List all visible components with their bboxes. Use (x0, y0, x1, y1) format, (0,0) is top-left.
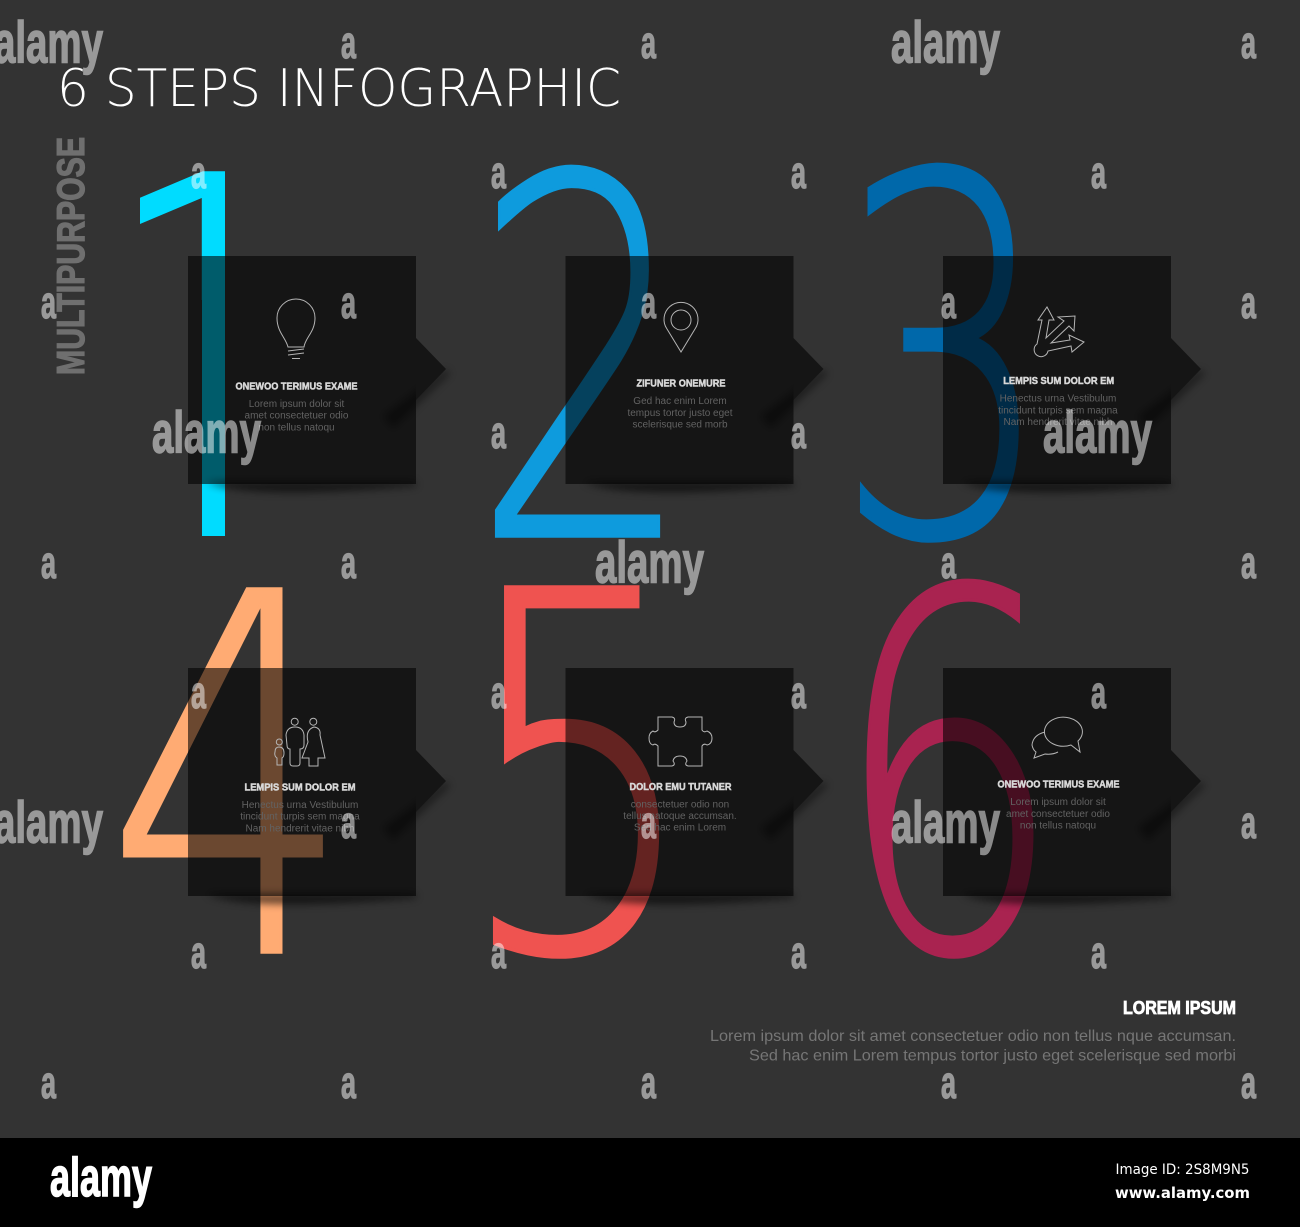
body text: tellus natoque accumsan. (623, 811, 737, 822)
watermarks: a (341, 797, 357, 848)
panel: step 6 (832, 487, 1205, 1068)
body text (998, 394, 1118, 428)
watermarks: a (41, 277, 57, 328)
watermarks: a (491, 927, 507, 978)
watermarks: a (1241, 1057, 1257, 1108)
card with arrow (943, 668, 1205, 904)
body text: scelerisque sed morb (632, 420, 728, 430)
heading: DOLOR EMU TUTANER (630, 781, 732, 793)
watermarks: a (641, 277, 657, 328)
watermarks: a (1091, 667, 1107, 718)
card with arrow (188, 668, 450, 904)
number 5: 5 (456, 487, 700, 1068)
watermarks: a (491, 147, 507, 198)
footer text block (710, 998, 1236, 1064)
icon: family (275, 718, 325, 766)
watermarks: a (341, 537, 357, 588)
watermarks: alamy (152, 401, 261, 466)
watermarks: a (1241, 277, 1257, 328)
watermarks: a (341, 277, 357, 328)
body text: Sed hac enim Lorem (634, 822, 726, 834)
footer paragraph: Lorem ipsum dolor sit amet consectetuer odio non tellus nque accumsan. (710, 1028, 1236, 1045)
watermarks: a (341, 17, 357, 68)
heading: ONEWOO TERIMUS EXAME (998, 778, 1120, 790)
body text: Henectus urna Vestibulum (242, 800, 358, 811)
card with arrow (188, 256, 450, 492)
watermarks: a (641, 1057, 657, 1108)
body text: Nam hendrerit vitae nibh (246, 824, 354, 834)
watermarks: a (791, 927, 807, 978)
watermarks: a (941, 1057, 957, 1108)
body text: tincidunt turpis sem magna (240, 812, 360, 822)
body text: Henectus urna Vestibulum (1000, 394, 1116, 404)
number 1: 1 (57, 74, 358, 654)
watermarks: a (941, 537, 957, 588)
card with arrow (566, 668, 828, 904)
watermarks: a (191, 927, 207, 978)
watermarks: a (791, 667, 807, 718)
vertical label: MULTIPURPOSE (50, 137, 93, 375)
watermarks: a (941, 277, 957, 328)
body text: tincidunt turpis sem magna (998, 406, 1118, 416)
panel: step 2 (472, 75, 828, 654)
body text (1006, 797, 1110, 832)
body text (627, 396, 733, 430)
body text: amet consectetuer odio (245, 410, 349, 422)
watermarks: a (1241, 797, 1257, 848)
number 2: 2 (472, 75, 694, 654)
heading: LEMPIS SUM DOLOR EM (1003, 375, 1114, 387)
body text: Lorem ipsum dolor sit (249, 399, 345, 410)
bottom bar (0, 1138, 1300, 1227)
footer heading: LOREM IPSUM (1123, 998, 1236, 1018)
panel: step 3 (835, 72, 1205, 652)
title: 6 STEPS INFOGRAPHIC (57, 59, 621, 119)
watermarks: alamy (891, 791, 1000, 856)
icon: light bulb (277, 299, 315, 358)
body text: non tellus natoqu (1020, 820, 1096, 832)
body text (240, 800, 360, 834)
body text (245, 399, 349, 434)
watermarks: a (641, 17, 657, 68)
watermarks: a (791, 407, 807, 458)
watermarks: a (1091, 147, 1107, 198)
body text: Nam hendrerit vitae nibh (1004, 417, 1112, 428)
icon: puzzle piece (649, 717, 712, 766)
watermarks: a (191, 667, 207, 718)
watermarks: a (641, 797, 657, 848)
body text: amet consectetuer odio (1006, 809, 1110, 820)
number 6: 6 (832, 487, 1064, 1068)
panel: step 1 (57, 74, 450, 654)
watermarks: a (1241, 17, 1257, 68)
watermarks: a (491, 407, 507, 458)
card with arrow (943, 256, 1205, 492)
body text (623, 800, 737, 834)
panel: step 4 (106, 490, 450, 1070)
image id: Image ID: 2S8M9N5 (1116, 1162, 1250, 1178)
footer paragraph (710, 1028, 1236, 1064)
watermarks: a (41, 537, 57, 588)
watermarks: alamy (1043, 401, 1152, 466)
icon: branching arrows (1034, 307, 1084, 357)
watermarks: alamy (595, 531, 704, 596)
logo: alamy (50, 1146, 152, 1208)
icon: map pin (664, 302, 698, 352)
body text: consectetuer odio non (631, 800, 729, 810)
watermarks: a (491, 667, 507, 718)
watermarks: a (341, 1057, 357, 1108)
body text: Ged hac enim Lorem (633, 396, 727, 407)
number 4: 4 (106, 490, 353, 1070)
panel: step 5 (456, 487, 828, 1068)
watermarks: a (791, 147, 807, 198)
icon: speech bubbles (1032, 717, 1082, 758)
body text: non tellus natoqu (258, 422, 335, 434)
watermarks: alamy (891, 11, 1000, 76)
heading: ONEWOO TERIMUS EXAME (236, 380, 358, 392)
heading: ZIFUNER ONEMURE (636, 378, 726, 390)
body text: tempus tortor justo eget (627, 408, 733, 419)
card with arrow (566, 256, 828, 492)
heading: LEMPIS SUM DOLOR EM (244, 782, 356, 794)
footer paragraph: Sed hac enim Lorem tempus tortor justo eget scelerisque sed morbi (749, 1048, 1236, 1064)
watermarks: a (191, 147, 207, 198)
watermarks: a (1241, 537, 1257, 588)
body text: Lorem ipsum dolor sit (1010, 797, 1106, 808)
watermarks: a (41, 1057, 57, 1108)
watermarks: a (1091, 927, 1107, 978)
number 3: 3 (835, 72, 1054, 652)
website: www.alamy.com (1115, 1184, 1250, 1202)
